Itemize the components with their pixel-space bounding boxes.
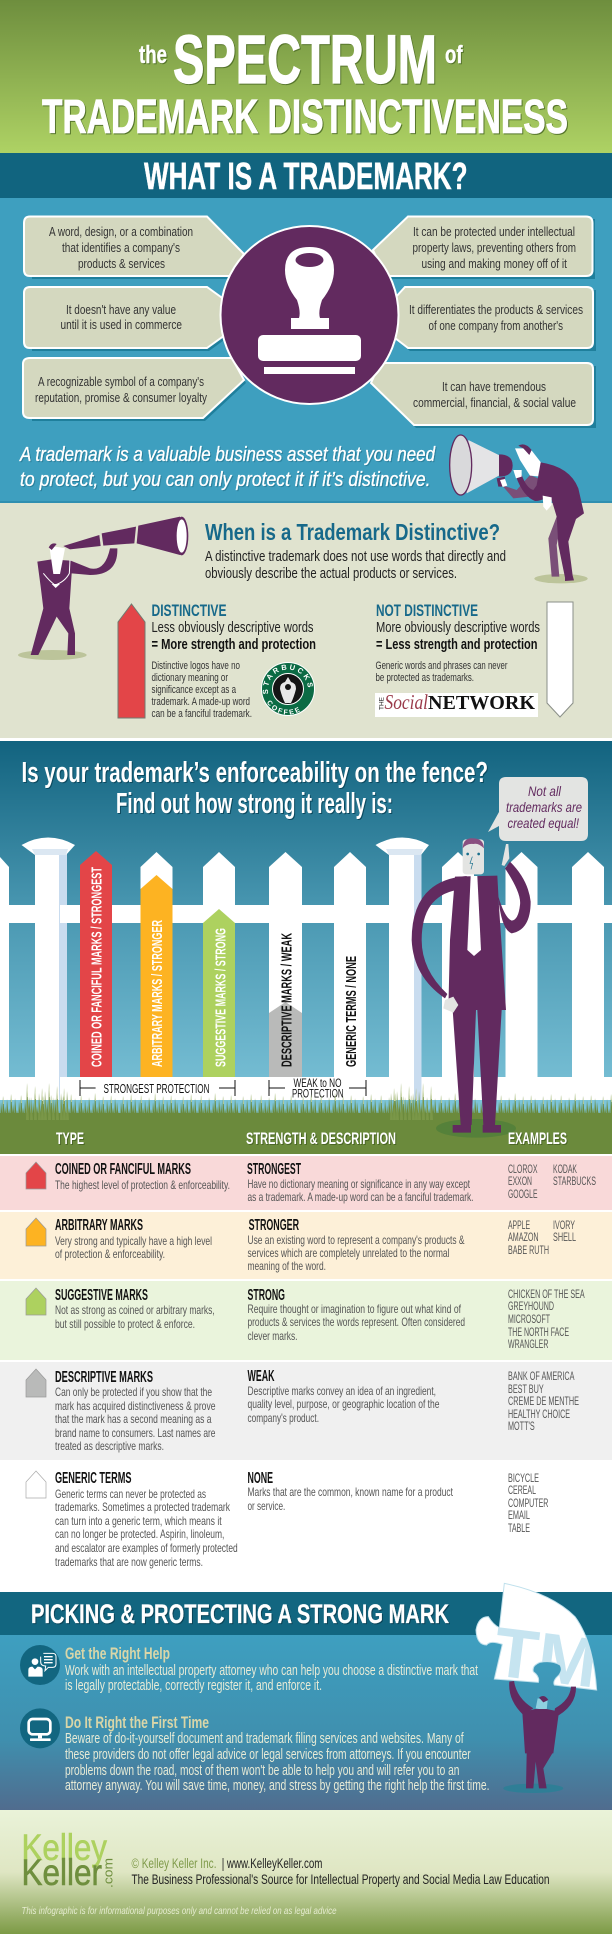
table row: suggestive: SUGGESTIVE MARKS <box>55 1287 148 1304</box>
callout: protected under IP laws <box>373 216 592 276</box>
table row: generic: trademarks. Sometimes a protected trademark <box>55 1500 231 1514</box>
speech bubble: created equal! <box>508 815 579 831</box>
callout: word design combination: that identifies a company's <box>62 240 180 255</box>
table row: arbitrary: of protection & enforceability. <box>55 1247 165 1261</box>
column: distinctive: = More strength and protection <box>152 636 316 653</box>
panel: fence <box>0 741 612 1154</box>
logo: kelley keller: Kelley <box>22 1827 107 1868</box>
table row: descriptive: WEAK <box>248 1368 275 1385</box>
table row: generic: Marks that are the common, known name for a product <box>248 1485 453 1499</box>
table row: arbitrary: ARBITRARY MARKS <box>55 1217 143 1234</box>
header banner <box>0 0 612 153</box>
logo: the social network: THE <box>380 697 386 710</box>
text: do it right the first time <box>65 1713 490 1794</box>
table row: coined or fanciful: EXXON <box>508 1174 532 1188</box>
callouts shadows and shapes <box>32 219 596 428</box>
table row: arbitrary: Very strong and typically have a high level <box>55 1234 212 1248</box>
table row: generic: CEREAL <box>508 1483 536 1497</box>
column: distinctive: trademark. A made-up word <box>152 696 250 708</box>
bar: generic: GENERIC TERMS / NONE <box>343 956 360 1067</box>
callout: word design combination: products & services <box>78 256 165 271</box>
title: of <box>445 41 463 69</box>
bar: coined or fanciful: COINED OR FANCIFUL MARKS / STRONGEST <box>88 867 106 1067</box>
panel: picking and protecting <box>0 1583 612 1810</box>
icon: computer monitor <box>20 1708 60 1748</box>
heading band: what is a trademark: WHAT IS A TRADEMARK? <box>144 156 468 198</box>
column: distinctive: Distinctive logos have no <box>152 660 240 672</box>
tagline <box>19 444 436 491</box>
table row: descriptive: Can only be protected if you show that the <box>55 1385 212 1399</box>
heading <box>22 757 488 820</box>
icon: starbucks logo: COFFEE <box>268 700 300 714</box>
table row: descriptive <box>0 1362 612 1460</box>
bracket: strongest protection: STRONGEST PROTECTION <box>104 1081 210 1096</box>
text: get the right help <box>65 1644 478 1694</box>
table row: descriptive: HEALTHY CHOICE <box>508 1407 570 1421</box>
intro text: obviously describe the actual products or services. <box>205 565 457 582</box>
table row: suggestive: MICROSOFT <box>508 1312 550 1326</box>
table row: generic: can turn into a generic term, which means it <box>55 1514 222 1528</box>
table row: generic: NONE <box>248 1470 273 1487</box>
table row: descriptive: MOTT'S <box>508 1419 535 1433</box>
text: get the right help: is legally protectable, correctly register it, and enforce it. <box>65 1678 322 1694</box>
logo: the social network: Social <box>384 690 428 714</box>
table row: generic: or service. <box>248 1499 285 1513</box>
callout: recognizable symbol: A recognizable symbol of a company's <box>38 374 204 389</box>
fence post caps <box>22 838 429 855</box>
callout: differentiates: of one company from another's <box>428 318 563 333</box>
bar: coined or fanciful <box>80 851 112 1077</box>
table row: generic: EMAIL <box>508 1508 530 1522</box>
bar: arbitrary: ARBITRARY MARKS / STRONGER <box>149 920 166 1067</box>
table row: descriptive: that the mark has a second meaning as a <box>55 1412 212 1426</box>
column: distinctive <box>152 601 316 720</box>
table row: generic: BICYCLE <box>508 1471 539 1485</box>
bar: descriptive <box>269 933 302 1077</box>
text: do it right the first time: Do It Right the First Time <box>65 1713 209 1732</box>
callout: protected under IP laws: using and making money off of it <box>422 256 567 271</box>
bracket: weak to no protection <box>269 1076 366 1100</box>
callout: word design combination <box>24 216 244 276</box>
column: distinctive: can be a fanciful trademark. <box>152 708 252 720</box>
table row: arbitrary: services which are completely unrelated to the normal <box>248 1246 450 1260</box>
table row: suggestive: but still possible to protect & enforce. <box>55 1317 195 1331</box>
column: distinctive: Less obviously descriptive words <box>152 619 314 636</box>
grass <box>0 1083 612 1121</box>
table row: coined or fanciful <box>0 1156 612 1210</box>
table header <box>56 1129 567 1148</box>
table row: generic: trademarks that are now generic terms. <box>55 1555 203 1569</box>
table row: suggestive: clever marks. <box>248 1329 298 1343</box>
column: not distinctive: be protected as trademarks. <box>376 672 474 684</box>
title: SPECTRUM <box>173 21 437 98</box>
table row: arbitrary: meaning of the word. <box>248 1259 326 1273</box>
panel: when is a trademark distinctive <box>0 434 612 738</box>
footer credit: | www.KelleyKeller.com <box>222 1855 322 1871</box>
table row: descriptive: quality level, purpose, or geographic location of the <box>248 1397 440 1411</box>
icon: man holding TM puzzle piece: TM <box>490 1612 602 1702</box>
table row: descriptive: BEST BUY <box>508 1382 544 1396</box>
table row: coined or fanciful: Have no dictionary meaning or significance in any way except <box>248 1177 470 1191</box>
column: distinctive: DISTINCTIVE <box>152 601 226 620</box>
column: not distinctive: Generic words and phrases can never <box>376 660 508 672</box>
speech bubble: trademarks are <box>506 799 582 815</box>
table row: suggestive: THE NORTH FACE <box>508 1325 569 1339</box>
logo: kelley keller: Keller <box>22 1852 102 1893</box>
table row: generic: Generic terms can never be protected as <box>55 1487 206 1501</box>
bracket: weak to no protection: WEAK to NO <box>294 1076 342 1090</box>
table row: arbitrary: APPLE <box>508 1218 530 1232</box>
icon: starbucks logo: STARBUCKS <box>262 664 313 694</box>
icon: telescope man <box>18 517 188 660</box>
callout: recognizable symbol: reputation, promise & consumer loyalty <box>35 390 207 405</box>
table row: descriptive: mark has acquired distinctiveness & prove <box>55 1399 216 1413</box>
callout: tremendous value: It can have tremendous <box>442 379 546 394</box>
table row: descriptive: DESCRIPTIVE MARKS <box>55 1369 153 1386</box>
bar: arbitrary <box>140 875 172 1077</box>
callout: differentiates <box>395 287 593 348</box>
arrow: distinctive red <box>118 604 145 718</box>
table row: descriptive: company's product. <box>248 1411 319 1425</box>
bar: suggestive <box>203 909 235 1077</box>
arrow: not distinctive white <box>547 602 573 717</box>
panel: what is a trademark <box>0 198 612 503</box>
column: not distinctive <box>376 601 540 684</box>
table row: arbitrary: AMAZON <box>508 1230 539 1244</box>
table row: descriptive: Descriptive marks convey an idea of an ingredient, <box>248 1384 436 1398</box>
table row: generic <box>0 1460 612 1592</box>
column: not distinctive: More obviously descriptive words <box>376 619 540 636</box>
callout: no value until used: until it is used in commerce <box>60 317 182 332</box>
table row: generic: and escalator are examples of formerly protected <box>55 1541 238 1555</box>
icon: man holding TM puzzle piece <box>476 1583 602 1793</box>
table row: arbitrary <box>0 1212 612 1279</box>
table row: suggestive: STRONG <box>248 1287 285 1304</box>
title <box>42 21 568 144</box>
text: do it right the first time: Beware of do-it-yourself document and trademark filing services and websites. Many of <box>65 1731 464 1747</box>
bar: suggestive: SUGGESTIVE MARKS / STRONG <box>212 928 230 1067</box>
table header: EXAMPLES <box>508 1129 567 1148</box>
table row: generic: can no longer be protected. Aspirin, linoleum, <box>55 1527 224 1541</box>
table row: suggestive: products & services the words represent. Often considered <box>248 1315 465 1329</box>
table row: coined or fanciful: CLOROX <box>508 1162 538 1176</box>
column: not distinctive: = Less strength and protection <box>376 636 538 653</box>
callout: no value until used <box>24 287 225 348</box>
table row: arbitrary: Use an existing word to represent a company's products & <box>248 1233 464 1247</box>
icon: megaphone man <box>450 435 588 583</box>
bracket: strongest protection <box>80 1080 235 1096</box>
fence pickets and rails <box>0 852 612 1100</box>
table row: coined or fanciful: as a trademark. A made-up word can be a fanciful trademark. <box>248 1190 474 1204</box>
icon: attorney chat <box>20 1645 60 1685</box>
text: get the right help: Get the Right Help <box>65 1644 170 1663</box>
table row: arbitrary: STRONGER <box>249 1217 299 1234</box>
speech bubble: Not all <box>528 783 562 799</box>
disclaimer: This infographic is for informational purposes only and cannot be relied on as legal advice <box>22 1905 337 1917</box>
table row: suggestive: WRANGLER <box>508 1337 549 1351</box>
table row: suggestive: GREYHOUND <box>508 1299 554 1313</box>
table row: arbitrary: BABE RUTH <box>508 1243 549 1257</box>
heading: PICKING & PROTECTING A STRONG MARK <box>31 1599 449 1629</box>
table row: coined or fanciful: STRONGEST <box>247 1161 301 1178</box>
table row: coined or fanciful: COINED OR FANCIFUL MARKS <box>55 1161 191 1178</box>
logo: the social network: NETWORK <box>428 692 535 714</box>
table row: generic: GENERIC TERMS <box>55 1470 132 1487</box>
column: not distinctive: NOT DISTINCTIVE <box>376 601 478 620</box>
icon: stamp in circle <box>220 226 398 404</box>
table row: arbitrary: SHELL <box>553 1230 576 1244</box>
tagline: A trademark is a valuable business asset that you need <box>19 444 436 466</box>
table row: suggestive: Not as strong as coined or arbitrary marks, <box>55 1303 215 1317</box>
speech bubble <box>488 777 588 841</box>
callout: no value until used: It doesn't have any value <box>66 302 176 317</box>
callout: word design combination: A word, design, or a combination <box>49 224 193 239</box>
logo: the social network <box>375 690 538 717</box>
column: distinctive: dictionary meaning or <box>152 672 228 684</box>
heading: Find out how strong it really is: <box>116 788 393 820</box>
callout: tremendous value <box>371 363 593 425</box>
table row: suggestive <box>0 1281 612 1360</box>
callout: recognizable symbol <box>23 358 244 418</box>
table row: descriptive: brand name to consumers. Last names are <box>55 1426 216 1440</box>
panel: footer <box>0 1810 612 1934</box>
ground <box>0 1120 612 1154</box>
text: do it right the first time: problems down the road, most of them won't be able to help you and will refer you to an <box>65 1763 459 1779</box>
column: distinctive: significance except as a <box>152 684 237 696</box>
table row: coined or fanciful: The highest level of protection & enforceability. <box>55 1178 230 1192</box>
icon: standing man <box>412 838 531 1138</box>
tagline: to protect, but you can only protect it if it’s distinctive. <box>20 469 430 491</box>
table row: coined or fanciful: GOOGLE <box>508 1187 538 1201</box>
title: the <box>139 41 167 69</box>
table header: STRENGTH & DESCRIPTION <box>246 1129 396 1148</box>
table header: TYPE <box>56 1129 84 1148</box>
table row: coined or fanciful: KODAK <box>553 1162 577 1176</box>
table row: generic: TABLE <box>508 1521 530 1535</box>
intro text: A distinctive trademark does not use words that directly and <box>205 548 506 565</box>
table row: arbitrary: IVORY <box>553 1218 575 1232</box>
logo: kelley keller: .com <box>100 1858 116 1888</box>
footer credit <box>132 1855 550 1887</box>
table row: suggestive: Require thought or imagination to figure out what kind of <box>248 1302 461 1316</box>
bracket: weak to no protection: PROTECTION <box>292 1086 344 1100</box>
table row: descriptive: treated as descriptive marks. <box>55 1439 164 1453</box>
table row: generic: COMPUTER <box>508 1496 549 1510</box>
logo: kelley keller <box>22 1827 116 1893</box>
footer credit: © Kelley Keller Inc. <box>132 1855 216 1871</box>
icon: starbucks logo <box>261 662 315 716</box>
heading: When is a Trademark Distinctive? <box>205 519 500 545</box>
bar: descriptive: DESCRIPTIVE MARKS / WEAK <box>278 933 296 1067</box>
intro text <box>205 548 506 582</box>
